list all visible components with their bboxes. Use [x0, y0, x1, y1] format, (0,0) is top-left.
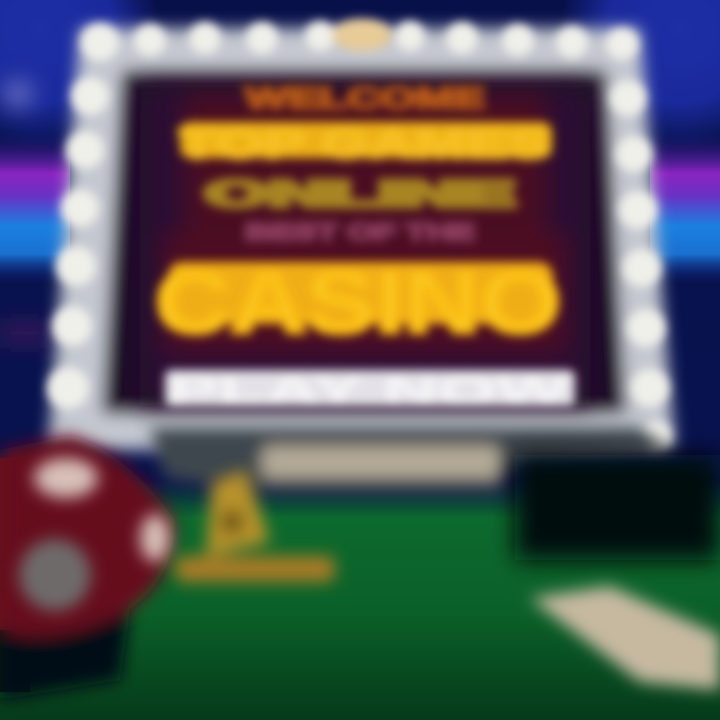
- black box: [515, 455, 720, 560]
- main title: CASINO: CASINO: [156, 252, 560, 351]
- heading line two: ONLINE: [205, 173, 515, 214]
- white text row: [165, 369, 575, 413]
- marquee frame: [48, 28, 675, 450]
- heading small line three: BEST OF THE: [245, 219, 475, 246]
- heading line one: [179, 120, 552, 167]
- background: left neon streaks: [0, 81, 70, 341]
- playing card: [530, 586, 720, 690]
- gold trophy object: [175, 470, 335, 582]
- marquee top small heading: WELCOME: [245, 82, 485, 115]
- white text row: PLAY NOW: [168, 369, 568, 413]
- green felt table: [0, 480, 720, 720]
- background: right neon streaks: [650, 130, 720, 285]
- marquee light bulbs: [47, 19, 671, 451]
- heading line one: TOP GAMES: [179, 120, 549, 167]
- marquee inner panel: [140, 85, 590, 405]
- red die: [0, 435, 175, 700]
- stage base under marquee: [150, 428, 670, 492]
- die pips: [19, 458, 170, 611]
